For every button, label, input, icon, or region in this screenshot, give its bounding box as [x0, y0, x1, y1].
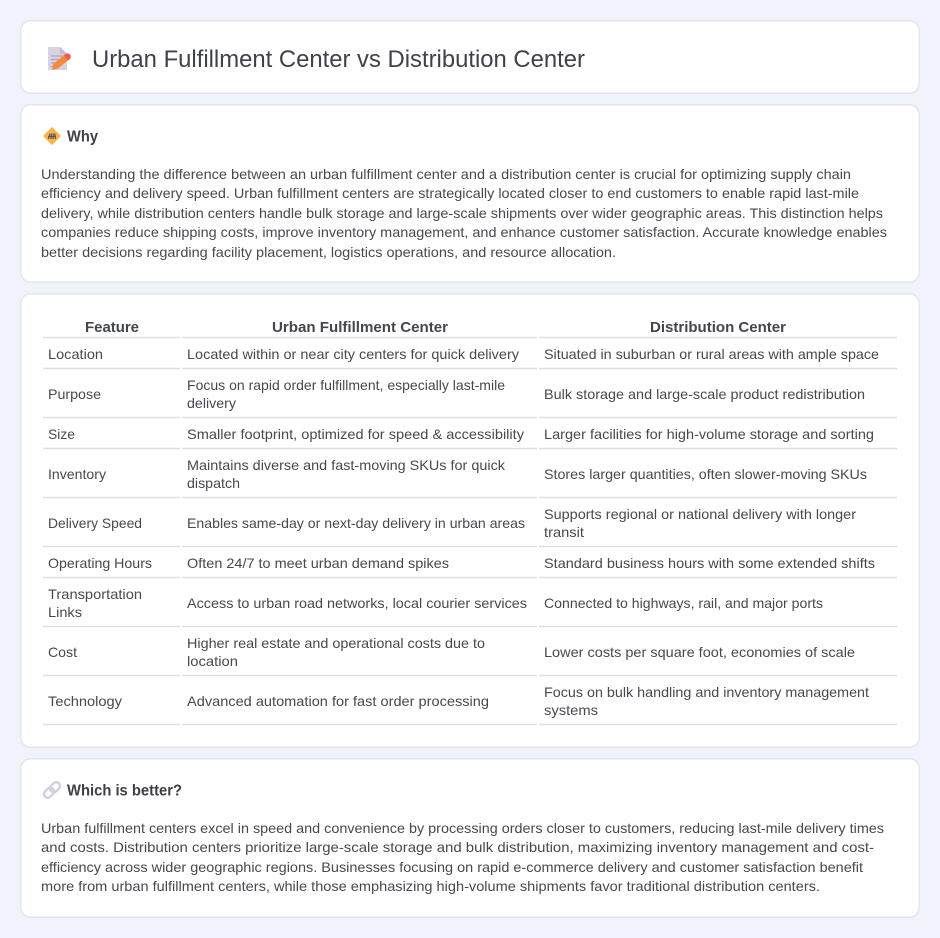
- panel: which is better: [21, 759, 919, 917]
- row: cost: Higher real estate and operational costs due to: [187, 635, 485, 651]
- row: size: Smaller footprint, optimized for speed & accessibility: [187, 426, 524, 442]
- row: cost: Cost: [48, 644, 77, 660]
- row: size: [48, 426, 874, 442]
- icon: document with pencil: [48, 47, 71, 70]
- text block: which is better paragraph: [41, 820, 884, 894]
- row: operating hours: Operating Hours: [48, 555, 152, 571]
- row: technology: Technology: [48, 693, 122, 709]
- table header row: [85, 319, 786, 336]
- icon: road sign diamond: [44, 128, 60, 144]
- row: technology: systems: [544, 702, 598, 718]
- row: inventory: [48, 457, 867, 491]
- row: transportation links: Links: [48, 604, 82, 620]
- row: operating hours: [48, 555, 875, 571]
- table header row: Distribution Center: [650, 319, 786, 336]
- row: cost: Lower costs per square foot, economies of scale: [544, 644, 855, 660]
- row: purpose: delivery: [187, 395, 236, 411]
- text block: why paragraph: [41, 166, 887, 260]
- row: technology: Advanced automation for fast order processing: [187, 693, 489, 709]
- row: delivery speed: [48, 506, 856, 540]
- row: transportation links: Access to urban road networks, local courier services: [187, 595, 527, 611]
- row: transportation links: [48, 586, 823, 620]
- text block: which is better paragraph: and costs. Distribution centers prioritize large-scale storage and bulk distribution, maximizing inventory management and cost-: [41, 839, 874, 855]
- row: location: Located within or near city centers for quick delivery: [187, 346, 519, 362]
- row: purpose: Focus on rapid order fulfillment, especially last-mile: [187, 377, 505, 393]
- row: location: [48, 346, 879, 362]
- text block: why paragraph: efficiency and delivery speed. Urban fulfillment centers are strategically located closer to end customers to enable rapid last-mile: [41, 185, 859, 201]
- row: delivery speed: Delivery Speed: [48, 515, 142, 531]
- text block: why paragraph: Understanding the difference between an urban fulfillment center and a distribution center is crucial for optimizing supply chain: [41, 166, 851, 182]
- row: purpose: Bulk storage and large-scale product redistribution: [544, 386, 865, 402]
- row: cost: [48, 635, 855, 669]
- row: inventory: dispatch: [187, 475, 240, 491]
- row: delivery speed: Enables same-day or next-day delivery in urban areas: [187, 515, 525, 531]
- row: delivery speed: transit: [544, 524, 584, 540]
- row: technology: Focus on bulk handling and inventory management: [544, 684, 869, 700]
- row: purpose: [48, 377, 865, 411]
- panel: comparison table: [21, 294, 919, 747]
- row: operating hours: Often 24/7 to meet urban demand spikes: [187, 555, 449, 571]
- row: technology: [48, 684, 869, 718]
- row: location: Situated in suburban or rural areas with ample space: [544, 346, 879, 362]
- panel: why: [21, 105, 919, 282]
- text block: why paragraph: better decisions regarding facility placement, logistics operations, and resource allocation.: [41, 244, 616, 260]
- text block: which is better paragraph: Urban fulfillment centers excel in speed and convenience by processing orders closer to customers, reducing last-mile delivery times: [41, 820, 884, 836]
- row: inventory: Stores larger quantities, often slower-moving SKUs: [544, 466, 867, 482]
- row: purpose: Purpose: [48, 386, 101, 402]
- row: location: Location: [48, 346, 103, 362]
- text block: which is better paragraph: efficiency across wider geographic regions. Businesses focusing on rapid e-commerce delivery and customer satisfaction benefit: [41, 859, 863, 875]
- heading: why: Why: [67, 128, 98, 146]
- panel: title header: [21, 21, 919, 93]
- row: operating hours: Standard business hours with some extended shifts: [544, 555, 875, 571]
- row: inventory: Inventory: [48, 466, 106, 482]
- row: size: Larger facilities for high-volume storage and sorting: [544, 426, 874, 442]
- text block: which is better paragraph: more from urban fulfillment centers, while those emphasizing high-volume shipments favor traditional distribution centers.: [41, 878, 820, 894]
- icon: chain link: [42, 781, 62, 799]
- title: Urban Fulfillment Center vs Distribution Center: [92, 46, 585, 73]
- row: cost: location: [187, 653, 238, 669]
- row: delivery speed: Supports regional or national delivery with longer: [544, 506, 856, 522]
- text block: why paragraph: delivery, while distribution centers handle bulk storage and large-scale shipments over wider geographic areas. This distinction helps: [41, 205, 883, 221]
- row: transportation links: Connected to highways, rail, and major ports: [544, 595, 823, 611]
- text block: why paragraph: companies reduce shipping costs, improve inventory management, and enhance customer satisfaction. Accurate knowledge enables: [41, 224, 887, 240]
- table header row: Urban Fulfillment Center: [272, 319, 448, 336]
- row: transportation links: Transportation: [48, 586, 142, 602]
- heading: which is better: Which is better?: [67, 782, 182, 800]
- row: inventory: Maintains diverse and fast-moving SKUs for quick: [187, 457, 506, 473]
- row: size: Size: [48, 426, 75, 442]
- table header row: Feature: [85, 319, 139, 336]
